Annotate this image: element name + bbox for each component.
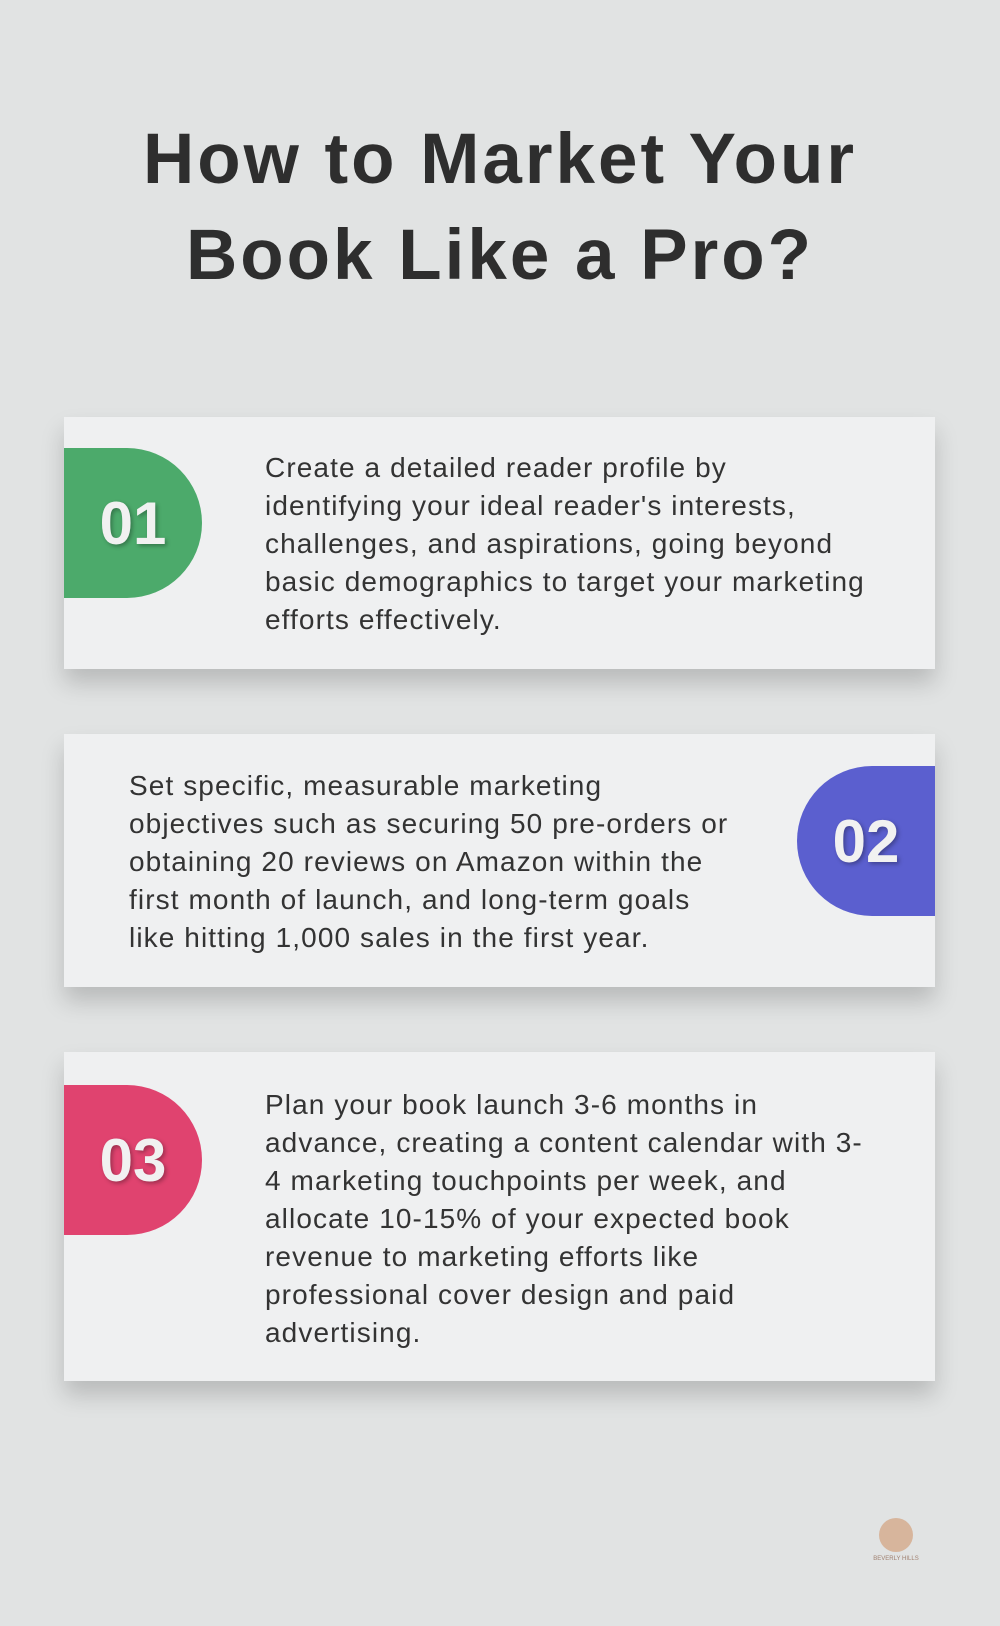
text 1: efforts effectively.	[265, 604, 502, 635]
text 1	[265, 452, 865, 635]
text 2: like hitting 1,000 sales in the first year.	[129, 922, 649, 953]
badge 02: 02	[833, 808, 899, 874]
text 1: challenges, and aspirations, going beyond	[265, 528, 833, 559]
text 3: revenue to marketing efforts like	[265, 1241, 699, 1272]
text 2: objectives such as securing 50 pre-orders or	[129, 808, 728, 839]
text 1: basic demographics to target your marketing	[265, 566, 865, 597]
text 3: advance, creating a content calendar with 3-	[265, 1127, 863, 1158]
text 3: Plan your book launch 3-6 months in	[265, 1089, 758, 1120]
title	[143, 120, 857, 295]
badge 02	[797, 766, 935, 916]
badge 03	[64, 1085, 202, 1235]
text 1: identifying your ideal reader's interests,	[265, 490, 796, 521]
badge 01	[64, 448, 202, 598]
title: How to Market Your	[143, 120, 857, 199]
text 3: 4 marketing touchpoints per week, and	[265, 1165, 787, 1196]
text 3: advertising.	[265, 1317, 421, 1348]
text 2	[129, 770, 728, 953]
text 2: Set specific, measurable marketing	[129, 770, 602, 801]
card 3	[64, 1052, 935, 1381]
logo	[873, 1518, 919, 1562]
text 3: allocate 10-15% of your expected book	[265, 1203, 790, 1234]
text 2: obtaining 20 reviews on Amazon within the	[129, 846, 703, 877]
card 1	[64, 417, 935, 669]
card 2	[64, 734, 935, 987]
text 3: professional cover design and paid	[265, 1279, 735, 1310]
text 3	[265, 1089, 863, 1348]
title: Book Like a Pro?	[186, 216, 814, 295]
text 2: first month of launch, and long-term goals	[129, 884, 690, 915]
logo: BEVERLY HILLS	[873, 1556, 919, 1562]
text 1: Create a detailed reader profile by	[265, 452, 727, 483]
badge 01: 01	[100, 490, 166, 556]
badge 03: 03	[100, 1126, 166, 1194]
